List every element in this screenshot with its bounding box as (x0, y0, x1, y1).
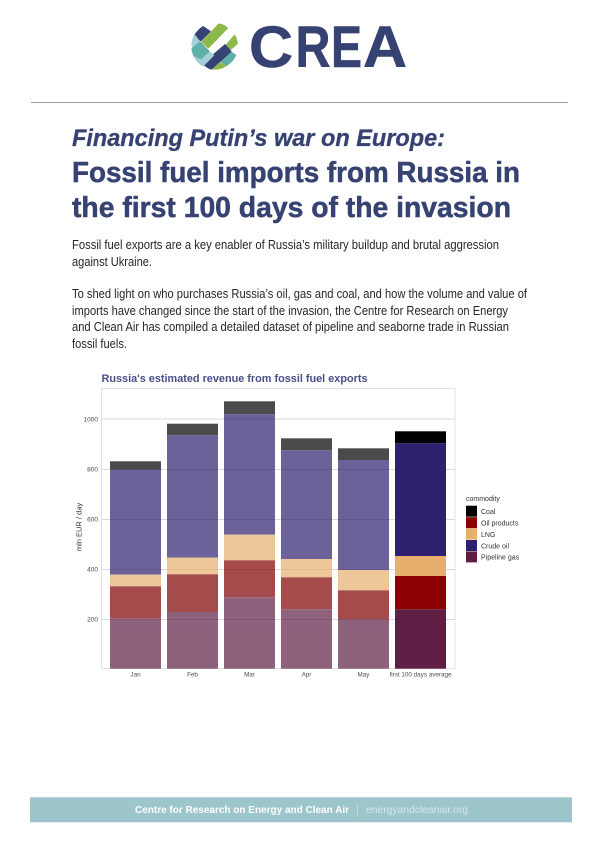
intro text block: Fossil fuel exports are a key enabler of Russia’s military buildup and brutal aggression (72, 238, 499, 252)
x axis labels: first 100 days average (390, 672, 452, 678)
footer organisation name: Centre for Research on Energy and Clean Air (135, 804, 349, 816)
legend: commodity: Crude oil (481, 543, 509, 550)
logo wordmark: E (331, 15, 362, 80)
logo wordmark: C (249, 15, 293, 80)
bar: Mar (224, 401, 275, 669)
y axis tick labels: 600 (87, 516, 98, 524)
y axis label: mln EUR / day (74, 503, 84, 551)
intro text block: fossil fuels. (72, 337, 127, 351)
legend: commodity: LNG (481, 532, 495, 539)
bar: Jan (110, 461, 161, 669)
title: Fossil fuel imports from Russia in (72, 157, 520, 189)
legend: commodity (466, 496, 520, 562)
legend: commodity: Oil products (481, 520, 519, 528)
legend: commodity: commodity (466, 496, 500, 503)
y axis tick labels (84, 416, 98, 624)
intro text block (72, 238, 527, 351)
title: Financing Putin’s war on Europe: (72, 125, 445, 152)
header logo: CREA (191, 23, 406, 70)
x axis labels: Jan (130, 672, 141, 678)
bar: Apr (281, 438, 332, 669)
intro text block: against Ukraine. (72, 255, 152, 269)
x axis labels: Feb (187, 672, 198, 678)
title (72, 125, 520, 224)
legend: commodity: Coal (481, 509, 496, 516)
icon: CREA striped circle (191, 23, 238, 70)
y axis tick labels: 1000 (84, 416, 98, 424)
x axis labels: Mar (244, 672, 255, 678)
y axis tick labels: 400 (87, 566, 98, 574)
title: the first 100 days of the invasion (72, 192, 511, 224)
plot frame and grid (101, 388, 455, 668)
bar: first 100 days average (395, 431, 446, 669)
x axis labels (130, 672, 452, 678)
intro text block: imports have changed since the start of the invasion, the Centre for Research on Energy (72, 304, 509, 318)
bar: May (338, 448, 389, 669)
y axis tick labels: 200 (87, 616, 98, 624)
footer website: energyandcleanair.org (366, 804, 468, 816)
legend: commodity: Pipeline gas (481, 555, 520, 562)
bar: Feb (167, 424, 218, 669)
y axis tick labels: 800 (87, 466, 98, 474)
x axis labels: May (358, 672, 370, 678)
chart title: Russia's estimated revenue from fossil fuel exports (102, 373, 368, 385)
stacked bar chart: revenue from fossil fuel exports (74, 373, 520, 678)
intro text block: and Clean Air has compiled a detailed dataset of pipeline and seaborne trade in Russian (72, 320, 509, 334)
intro text block: To shed light on who purchases Russia’s oil, gas and coal, and how the volume and value of (72, 287, 527, 301)
footer banner (30, 797, 572, 822)
x axis labels: Apr (302, 672, 311, 678)
logo wordmark: R (296, 15, 330, 80)
logo wordmark: A (363, 15, 407, 80)
logo wordmark (249, 15, 407, 80)
